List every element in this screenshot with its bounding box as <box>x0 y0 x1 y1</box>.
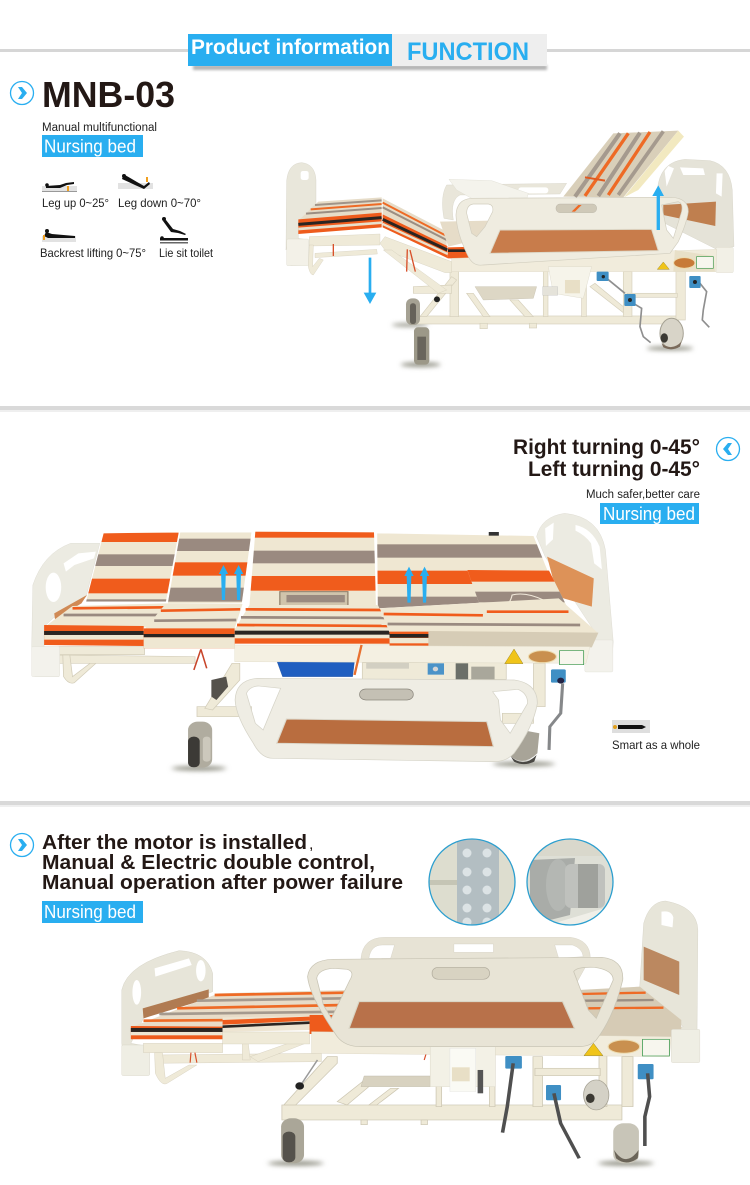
red straps <box>194 649 207 670</box>
icon: chevron left circle <box>716 438 740 460</box>
certificate label <box>642 1039 669 1056</box>
front side rail <box>235 678 537 762</box>
heading line 2: Manual & Electric double control, <box>42 852 375 874</box>
mattress: back section D <box>377 534 548 608</box>
front side rail <box>456 197 688 265</box>
arrow: down <box>364 258 376 304</box>
inset: motor <box>527 838 615 926</box>
wood panel <box>277 719 493 747</box>
left headboard <box>286 163 316 266</box>
heading line 3: Manual operation after power failure <box>42 872 403 894</box>
heading line 1: After the motor is installed <box>42 832 307 854</box>
badge <box>674 258 695 268</box>
label: nursing bed: Nursing bed <box>603 504 695 524</box>
top divider <box>0 49 750 52</box>
icon: chevron right circle <box>10 834 34 856</box>
badge <box>608 1040 640 1053</box>
base frame <box>413 270 685 329</box>
raised backrest <box>563 131 684 197</box>
main frame rail <box>452 249 717 272</box>
comma: , <box>309 836 313 853</box>
caption: backrest lifting: Backrest lifting 0~75° <box>40 246 146 260</box>
center lift column <box>430 1047 495 1093</box>
mattress: back section B <box>168 532 252 604</box>
badge <box>528 651 556 663</box>
mattress: left sections <box>131 990 345 1044</box>
crank handles <box>295 1056 654 1158</box>
mattress: back section A <box>86 532 179 602</box>
caption: leg up: Leg up 0~25° <box>42 196 109 210</box>
heading: right turning: Right turning 0-45° <box>513 436 700 459</box>
panel: MNB-03 specification <box>10 74 214 260</box>
label: nursing bed: Nursing bed <box>44 902 136 922</box>
mattress: right section <box>578 987 681 1037</box>
arrow: up <box>652 185 664 230</box>
icon: backrest lifting <box>42 229 76 242</box>
front side rail <box>308 957 623 1047</box>
base frame <box>282 1053 633 1125</box>
heading: left turning: Left turning 0-45° <box>528 458 700 481</box>
section tabs <box>188 34 547 70</box>
under-seat tray <box>475 287 537 300</box>
mattress: back section C <box>248 530 380 607</box>
warning label <box>505 649 523 664</box>
panel: motor text <box>10 832 403 923</box>
left headboard <box>122 951 213 1075</box>
divider <box>0 801 750 807</box>
leg frame <box>143 1040 321 1084</box>
wood panel <box>490 229 658 253</box>
heading: model: MNB-03 <box>42 74 175 115</box>
front wheels <box>281 1118 639 1163</box>
back rail and table <box>442 183 567 220</box>
main frame panel <box>312 1032 671 1057</box>
bed photo: flat, with motor <box>122 901 700 1166</box>
main frame panel <box>235 645 590 663</box>
right foot board <box>657 159 734 249</box>
label: nursing bed: Nursing bed <box>44 136 136 156</box>
toilet basin <box>277 661 355 677</box>
bed photo: side turning, front view <box>32 513 613 771</box>
toilet lid handle <box>280 592 348 608</box>
mattress: seat sections <box>44 598 598 648</box>
icon: leg down <box>118 174 153 189</box>
caption: lie sit toilet: Lie sit toilet <box>159 246 214 260</box>
tab: function: FUNCTION <box>407 38 529 66</box>
caption: leg down: Leg down 0~70° <box>118 196 201 210</box>
wood panel <box>349 1002 574 1028</box>
frame <box>59 647 545 723</box>
icon: lie sit toilet <box>160 217 188 244</box>
left headboard <box>32 543 100 677</box>
panel: turning text <box>513 436 740 752</box>
wheels <box>406 296 683 365</box>
rear wheel <box>584 1080 609 1110</box>
inset: remote control <box>428 838 516 926</box>
lowered leg frame <box>308 234 452 293</box>
certificate label <box>697 257 713 268</box>
icon: smart <box>612 720 650 733</box>
crank and box <box>428 663 566 750</box>
subtitle: Much safer,better care <box>586 489 700 501</box>
subtitle: Manual multifunctional <box>42 122 157 134</box>
pillow cushion <box>468 570 566 604</box>
crank handles <box>607 278 709 343</box>
icon: chevron right circle <box>10 82 34 104</box>
right footboard <box>640 901 698 1030</box>
wheels <box>188 722 539 768</box>
right headboard <box>537 513 613 672</box>
divider <box>0 406 750 412</box>
tab: product information: Product information <box>191 36 390 59</box>
certificate label <box>560 651 584 665</box>
under-frame mechanism <box>211 663 495 700</box>
bed photo: leg down, back raised <box>286 131 734 367</box>
caption: smart: Smart as a whole <box>612 738 700 752</box>
icon: leg up <box>42 182 77 192</box>
arrows: up <box>219 565 429 603</box>
warning label <box>584 1043 603 1056</box>
center lift column <box>543 267 592 298</box>
mattress: leg section <box>298 197 490 258</box>
warning label <box>657 262 669 269</box>
back rail <box>361 937 590 987</box>
